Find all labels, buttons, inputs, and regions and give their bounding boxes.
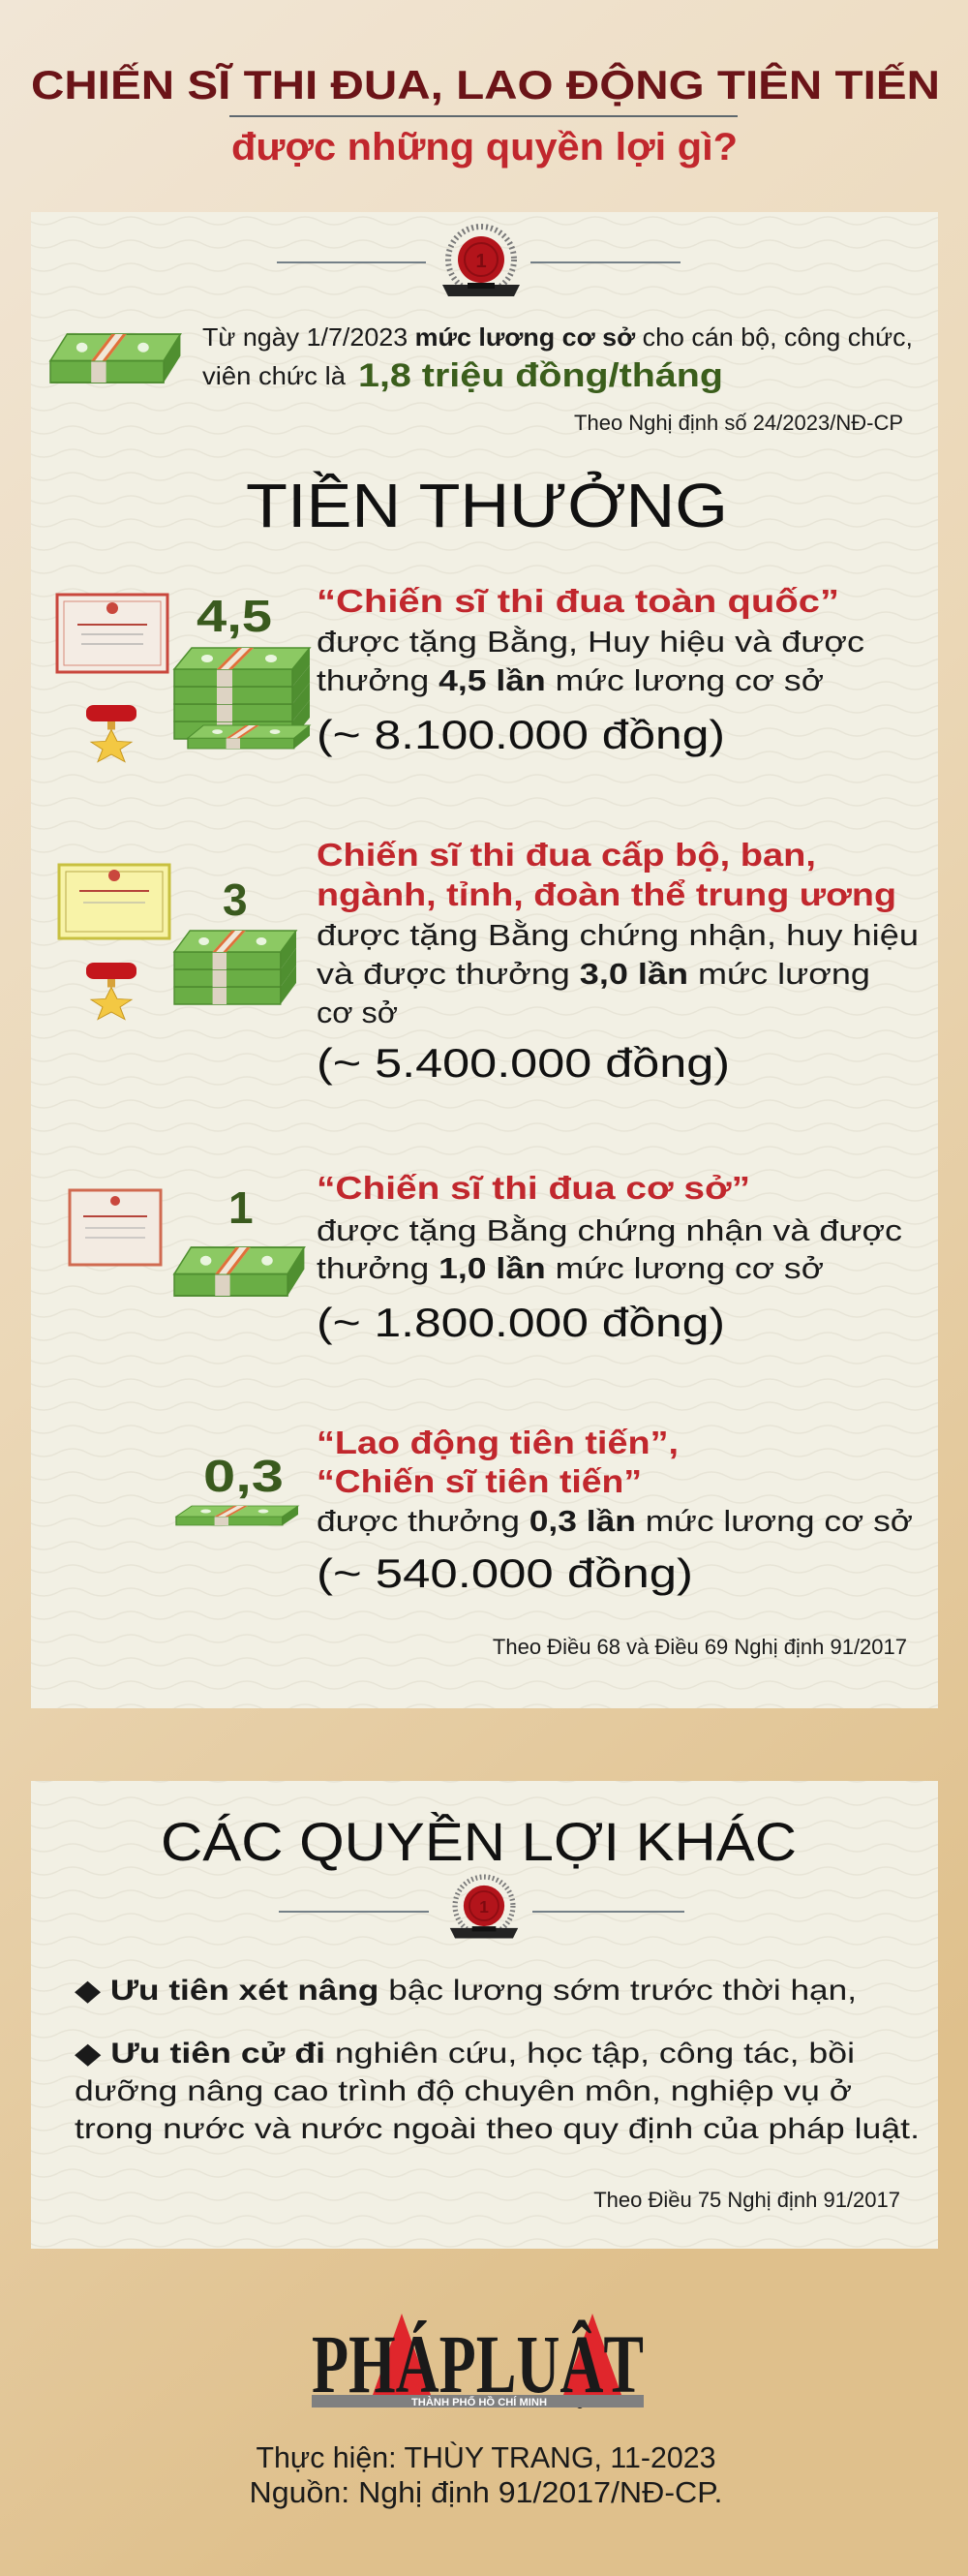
credits: Nguồn: Nghị định 91/2017/NĐ-CP. (250, 2475, 722, 2509)
icon: certificate (57, 595, 167, 672)
credits (250, 2440, 722, 2509)
credits: Thực hiện: THÙY TRANG, 11-2023 (256, 2440, 716, 2474)
icon: thin money bundle (176, 1506, 298, 1525)
item: chiến sĩ thi đua cấp bộ: ngành, tỉnh, đoàn thể trung ương (317, 876, 896, 912)
icon: money stack (174, 931, 296, 1004)
icon: medal (86, 705, 136, 762)
item: chiến sĩ thi đua cấp bộ (59, 837, 919, 1086)
icon: seal divider (277, 227, 681, 296)
bullet list: ◆ Ưu tiên cử đi nghiên cứu, học tập, công tác, bồi (75, 2038, 855, 2070)
logo: pháp luật: THÀNH PHỐ HỒ CHÍ MINH (411, 2395, 547, 2408)
item: chiến sĩ thi đua cơ sở (70, 1170, 902, 1345)
number: 3 (223, 874, 248, 925)
text: “Lao động tiên tiến”, (317, 1425, 679, 1460)
bullet list (75, 1975, 920, 2145)
item: lao động tiên tiến: “Chiến sĩ tiên tiến” (317, 1463, 642, 1499)
text block: base salary (202, 322, 913, 394)
text block: base salary: viên chức là (202, 361, 347, 390)
text: “Chiến sĩ thi đua toàn quốc” (317, 583, 839, 619)
number: 4,5 (197, 591, 272, 641)
icon: medal (86, 963, 136, 1020)
source note: Theo Điều 75 Nghị định 91/2017 (593, 2188, 900, 2212)
heading: CÁC QUYỀN LỢI KHÁC (161, 1811, 797, 1872)
item: chiến sĩ thi đua cấp bộ: được tặng Bằng chứng nhận, huy hiệu (317, 918, 919, 952)
icon: certificate (70, 1190, 161, 1265)
bullet list: trong nước và nước ngoài theo quy định của pháp luật. (75, 2113, 920, 2145)
panel: các quyền lợi khác (31, 1781, 938, 2249)
item: chiến sĩ thi đua toàn quốc: thưởng 4,5 lần mức lương cơ sở (317, 663, 824, 697)
item: chiến sĩ thi đua cấp bộ: cơ sở (317, 996, 398, 1029)
item: chiến sĩ thi đua cấp bộ: và được thưởng 3,0 lần mức lương (317, 957, 870, 991)
item: lao động tiên tiến: (~ 540.000 đồng) (317, 1550, 693, 1596)
text: “Chiến sĩ thi đua cơ sở” (317, 1170, 750, 1206)
item: chiến sĩ thi đua cấp bộ: (~ 5.400.000 đồng) (317, 1040, 730, 1086)
title: CHIẾN SĨ THI ĐUA, LAO ĐỘNG TIÊN TIẾN (31, 61, 940, 107)
item: chiến sĩ thi đua toàn quốc (57, 583, 864, 762)
item: chiến sĩ thi đua toàn quốc: được tặng Bằng, Huy hiệu và được (317, 625, 864, 659)
panel: tiền thưởng (31, 212, 938, 1708)
source note: Theo Nghị định số 24/2023/NĐ-CP (574, 411, 903, 435)
item: chiến sĩ thi đua cơ sở: thưởng 1,0 lần mức lương cơ sở (317, 1251, 824, 1285)
item: chiến sĩ thi đua cơ sở: được tặng Bằng chứng nhận và được (317, 1213, 902, 1247)
text block: base salary: Từ ngày 1/7/2023 mức lương cơ sở cho cán bộ, công chức, (202, 322, 913, 352)
text block: base salary: 1,8 triệu đồng/tháng (358, 357, 723, 394)
icon: money bundle (174, 1247, 304, 1296)
logo: pháp luật: PHÁPLUẬT (312, 2317, 644, 2410)
source note: Theo Điều 68 và Điều 69 Nghị định 91/2017 (493, 1635, 907, 1659)
number: 1 (228, 1182, 254, 1233)
icon: certificate (59, 865, 169, 938)
item: lao động tiên tiến (176, 1425, 913, 1596)
text: Chiến sĩ thi đua cấp bộ, ban, (317, 837, 816, 873)
icon: money bundle (50, 334, 180, 383)
icon: seal divider (279, 1877, 684, 1938)
bullet list: ◆ Ưu tiên xét nâng bậc lương sớm trước thời hạn, (75, 1975, 857, 2007)
bullet list: dưỡng nâng cao trình độ chuyên môn, nghiệp vụ ở (75, 2075, 852, 2107)
icon: money stack (174, 648, 310, 749)
title (31, 61, 940, 169)
heading: tiền thưởng: TIỀN THƯỞNG (246, 470, 728, 540)
item: chiến sĩ thi đua cơ sở: (~ 1.800.000 đồng) (317, 1300, 725, 1345)
title: được những quyền lợi gì? (231, 126, 738, 169)
item: lao động tiên tiến: được thưởng 0,3 lần mức lương cơ sở (317, 1504, 913, 1538)
item: chiến sĩ thi đua toàn quốc: (~ 8.100.000 đồng) (317, 712, 725, 757)
number: 0,3 (203, 1451, 284, 1501)
